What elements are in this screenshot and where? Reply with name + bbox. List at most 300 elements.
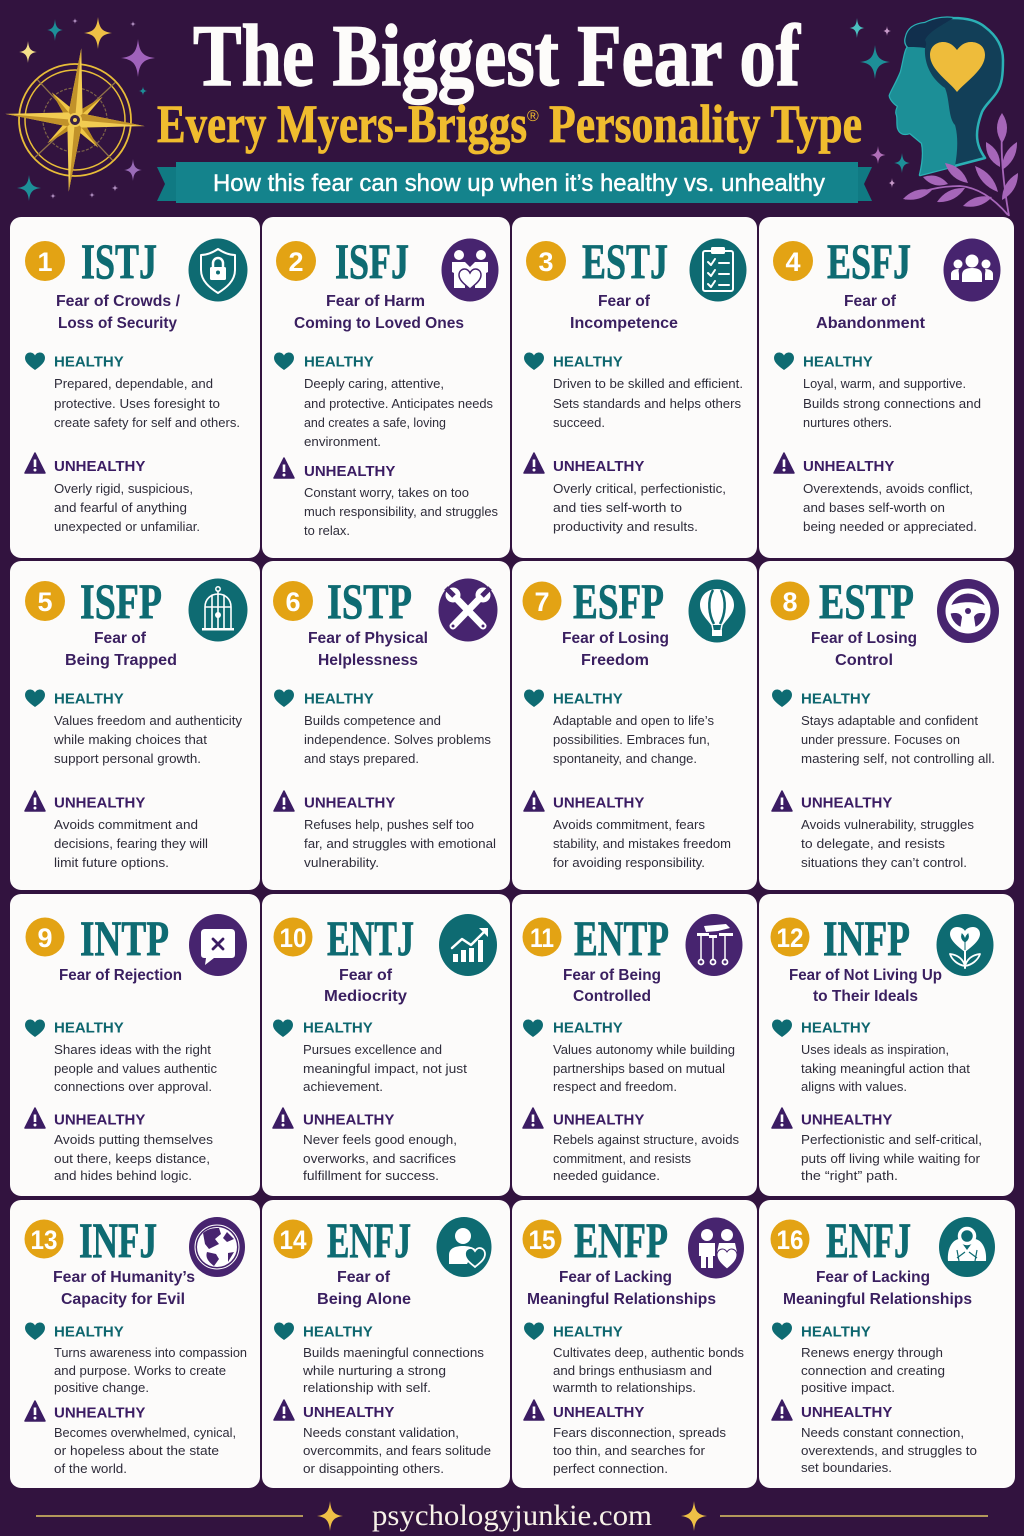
healthy section: people and values authentic [54, 1061, 218, 1076]
icon: two people with heart [688, 1218, 744, 1278]
unhealthy section: Needs constant connection, [801, 1425, 964, 1440]
unhealthy section: needed guidance. [553, 1168, 660, 1183]
type ISFJ: ISFJ [335, 233, 409, 289]
number badge 8: 8 [782, 587, 798, 617]
card 3: ESTJ [512, 217, 757, 558]
healthy section [274, 1322, 485, 1395]
unhealthy section: UNHEALTHY [54, 1112, 145, 1128]
fear heading: Fear of [94, 630, 147, 647]
unhealthy section: much responsibility, and struggles [304, 504, 498, 519]
healthy section: Pursues excellence and [303, 1042, 442, 1057]
banner ribbon: How this fear can show up when it’s healthy vs. unhealthy [213, 170, 825, 197]
unhealthy section: overextends, and struggles to [801, 1443, 977, 1458]
icon: crossed wrenches [438, 578, 498, 642]
number badge 2 [276, 241, 316, 281]
unhealthy section: to delegate, and resists [801, 836, 946, 851]
fear heading: Being Trapped [65, 652, 177, 669]
fear heading: Capacity for Evil [61, 1291, 185, 1308]
healthy section: HEALTHY [553, 690, 623, 708]
type ESTP: ESTP [819, 573, 914, 629]
healthy section: while nurturing a strong [302, 1363, 446, 1378]
fear heading: Fear of Physical [308, 630, 428, 647]
healthy section: Uses ideals as inspiration, [801, 1042, 949, 1057]
healthy section: Prepared, dependable, and [54, 376, 213, 391]
card 5: ISFP [10, 561, 260, 890]
icon: globe [189, 1217, 245, 1277]
card 12: INFP [759, 894, 1014, 1196]
healthy section: positive change. [54, 1380, 149, 1395]
type ISTP: ISTP [327, 573, 412, 629]
number badge 14 [274, 1220, 312, 1258]
unhealthy section: or hopeless about the state [54, 1443, 219, 1458]
fear heading: Fear of Crowds / [56, 293, 181, 310]
card 10: ENTJ [262, 894, 510, 1196]
number badge 5: 5 [37, 587, 53, 617]
healthy section: and brings enthusiasm and [553, 1363, 712, 1378]
healthy section: Shares ideas with the right [54, 1042, 211, 1057]
unhealthy section [25, 1108, 214, 1183]
number badge 1 [25, 241, 65, 281]
fear heading: Mediocrity [324, 988, 407, 1005]
healthy section: HEALTHY [303, 1020, 373, 1036]
healthy section: possibilities. Embraces fun, [553, 732, 710, 747]
healthy section: warmth to relationships. [552, 1380, 696, 1395]
healthy section: aligns with values. [801, 1079, 907, 1094]
unhealthy section: Constant worry, takes on too [304, 485, 469, 500]
healthy section: and creates a safe, loving [304, 415, 446, 430]
healthy section: Deeply caring, attentive, [304, 376, 444, 391]
unhealthy section: UNHEALTHY [54, 1404, 145, 1422]
number badge 15: 15 [528, 1225, 556, 1255]
fear heading: Meaningful Relationships [783, 1291, 972, 1308]
fear heading [53, 1269, 195, 1308]
unhealthy section: UNHEALTHY [304, 794, 395, 812]
card 7: ESFP [512, 561, 757, 890]
icon: hot air balloon [688, 580, 746, 642]
healthy section: connection and creating [801, 1363, 945, 1378]
type ISTJ: ISTJ [81, 233, 157, 289]
unhealthy section: UNHEALTHY [303, 1112, 394, 1128]
card 13: INFJ [10, 1200, 260, 1488]
unhealthy section: stability, and mistakes freedom [553, 836, 731, 851]
unhealthy section: UNHEALTHY [801, 794, 892, 812]
healthy section: and stays prepared. [304, 751, 419, 766]
fear heading: Abandonment [816, 315, 926, 332]
healthy section [274, 352, 493, 449]
unhealthy section [274, 791, 496, 870]
icon: rising bar chart [439, 914, 497, 976]
subtitle: Every Myers-Briggs Personality Type: Every Myers-Briggs [157, 94, 527, 154]
fear heading: Fear of Losing [811, 630, 917, 647]
number badge 13 [24, 1220, 64, 1258]
healthy section: HEALTHY [54, 354, 124, 370]
fear heading [783, 1269, 972, 1308]
healthy section: while making choices that [53, 732, 207, 747]
fear heading: Fear of Losing [562, 630, 669, 647]
fear heading: Loss of Security [58, 315, 177, 332]
unhealthy section: Fears disconnection, spreads [553, 1425, 727, 1440]
healthy section: HEALTHY [553, 354, 623, 370]
number badge 15 [522, 1220, 562, 1258]
healthy section: HEALTHY [553, 1324, 623, 1340]
unhealthy section: and ties self-worth to [553, 500, 682, 515]
unhealthy section [25, 791, 208, 870]
healthy section: connections over approval. [54, 1079, 212, 1094]
healthy section: Stays adaptable and confident [801, 713, 978, 728]
healthy section: and protective. Anticipates needs [304, 396, 493, 411]
icon: clipboard checklist [690, 238, 746, 302]
unhealthy section: Needs constant validation, [303, 1425, 459, 1440]
unhealthy section: Avoids commitment, fears [553, 817, 706, 832]
healthy section: Cultivates deep, authentic bonds [553, 1345, 744, 1360]
unhealthy section: unexpected or unfamiliar. [54, 519, 200, 534]
healthy section: Driven to be skilled and efficient. [553, 376, 743, 391]
healthy section: Sets standards and helps others [553, 396, 742, 411]
unhealthy section [772, 1108, 982, 1183]
healthy section: support personal growth. [54, 751, 201, 766]
healthy section: HEALTHY [303, 1324, 373, 1340]
healthy section: relationship with self. [303, 1380, 431, 1395]
number badge 11: 11 [530, 923, 554, 953]
icon: shield with lock [188, 238, 248, 302]
fear heading: Fear of Rejection [59, 967, 182, 984]
number badge 1: 1 [37, 247, 53, 277]
healthy section: Loyal, warm, and supportive. [803, 376, 966, 391]
card 15: ENFP [512, 1200, 757, 1488]
healthy section [25, 690, 243, 766]
unhealthy section: overworks, and sacrifices [303, 1151, 457, 1166]
subtitle: Every Myers-Briggs Personality Type [157, 94, 862, 154]
healthy section [273, 1020, 467, 1094]
number badge 2: 2 [288, 247, 304, 277]
unhealthy section: Refuses help, pushes self too [304, 817, 474, 832]
healthy section: mastering self, not controlling all. [801, 751, 995, 766]
unhealthy section [774, 453, 977, 534]
fear heading: Fear of Being [563, 967, 661, 984]
unhealthy section: UNHEALTHY [553, 458, 644, 475]
type ENTJ: ENTJ [327, 910, 414, 966]
icon: person with heart [436, 1217, 492, 1277]
number badge 12 [770, 918, 810, 956]
fear heading [789, 967, 942, 1005]
healthy section [274, 690, 491, 766]
fear heading: Being Alone [317, 1291, 411, 1308]
unhealthy section: too thin, and searches for [553, 1443, 706, 1458]
unhealthy section: UNHEALTHY [803, 458, 894, 475]
healthy section: nurtures others. [803, 415, 892, 430]
fear heading: Meaningful Relationships [527, 1291, 716, 1308]
unhealthy section: UNHEALTHY [801, 1112, 892, 1128]
unhealthy section [524, 1400, 727, 1476]
number badge 16: 16 [776, 1225, 804, 1255]
decorative stars left [17, 17, 155, 201]
healthy section: Builds maeningful connections [303, 1345, 485, 1360]
healthy section: under pressure. Focuses on [801, 732, 960, 747]
card 4: ESFJ [759, 217, 1014, 558]
unhealthy section [523, 1108, 740, 1183]
unhealthy section: Becomes overwhelmed, cynical, [54, 1425, 236, 1440]
fear heading: Fear of [339, 967, 393, 984]
footer [36, 1499, 988, 1532]
fear heading [56, 293, 181, 332]
unhealthy section: Overly critical, perfectionistic, [553, 481, 726, 496]
unhealthy section: and hides behind logic. [54, 1168, 192, 1183]
type ESTJ: ESTJ [582, 233, 668, 289]
unhealthy section: UNHEALTHY [553, 1404, 644, 1421]
unhealthy section: commitment, and resists [553, 1151, 691, 1166]
fear heading [816, 293, 926, 332]
healthy section: Values autonomy while building [553, 1042, 735, 1057]
type ESFJ: ESFJ [827, 233, 911, 289]
healthy section [523, 1020, 735, 1094]
unhealthy section [25, 453, 200, 534]
unhealthy section: perfect connection. [553, 1461, 668, 1476]
unhealthy section: and fearful of anything [54, 500, 187, 515]
healthy section: taking meaningful action that [801, 1061, 970, 1076]
healthy section: partnerships based on mutual [553, 1061, 725, 1076]
unhealthy section: out there, keeps distance, [54, 1151, 210, 1166]
number badge 3: 3 [538, 247, 554, 277]
unhealthy section: the “right” path. [801, 1168, 898, 1183]
fear heading: Fear of Lacking [559, 1269, 672, 1286]
healthy section: respect and freedom. [553, 1079, 677, 1094]
unhealthy section: Never feels good enough, [303, 1132, 457, 1147]
healthy section: HEALTHY [304, 690, 374, 708]
healthy section [772, 690, 995, 766]
healthy section: HEALTHY [801, 690, 871, 708]
unhealthy section [772, 791, 974, 870]
unhealthy section: set boundaries. [801, 1460, 892, 1475]
icon: parents with heart [442, 238, 498, 302]
type ENTP: ENTP [574, 910, 669, 966]
unhealthy section: puts off living while waiting for [801, 1151, 981, 1166]
unhealthy section: productivity and results. [553, 519, 698, 534]
unhealthy section: Overly rigid, suspicious, [54, 481, 193, 496]
number badge 12: 12 [776, 923, 804, 953]
decorative stars right [850, 18, 910, 188]
card 2: ISFJ [262, 217, 510, 558]
fear heading: Coming to Loved Ones [294, 315, 464, 332]
number badge 7 [522, 582, 562, 620]
card 1: ISTJ [10, 217, 260, 558]
fear heading [65, 630, 177, 669]
icon: birdcage [188, 578, 248, 642]
fear heading: Controlled [573, 988, 651, 1005]
unhealthy section: decisions, fearing they will [54, 836, 208, 851]
number badge 10 [274, 918, 312, 956]
unhealthy section: Rebels against structure, avoids [553, 1132, 740, 1147]
fear heading: Fear of Lacking [816, 1269, 930, 1286]
unhealthy section: fulfillment for success. [303, 1168, 439, 1183]
icon: purple leaves [903, 113, 1018, 216]
number badge 16 [770, 1220, 810, 1258]
type ISFP: ISFP [80, 573, 162, 629]
unhealthy section: Overextends, avoids conflict, [803, 481, 973, 496]
healthy section: Values freedom and authenticity [54, 713, 243, 728]
card 16: ENFJ [759, 1200, 1015, 1488]
unhealthy section: UNHEALTHY [553, 1112, 644, 1128]
unhealthy section: Avoids putting themselves [54, 1132, 214, 1147]
unhealthy section: to relax. [304, 523, 350, 538]
unhealthy section: UNHEALTHY [303, 1404, 394, 1421]
unhealthy section: UNHEALTHY [54, 458, 145, 475]
fear heading [308, 630, 428, 669]
fear heading [570, 293, 678, 332]
unhealthy section: or disappointing others. [303, 1461, 444, 1476]
healthy section [772, 1020, 970, 1094]
icon: compass [0, 42, 151, 198]
unhealthy section: vulnerability. [304, 855, 379, 870]
icon: steering wheel [937, 579, 999, 643]
unhealthy section: UNHEALTHY [304, 463, 395, 480]
unhealthy section [25, 1401, 236, 1476]
healthy section [774, 352, 981, 430]
number badge 5 [25, 581, 65, 621]
icon: heart growing as plant [936, 914, 994, 976]
unhealthy section: for avoiding responsibility. [553, 855, 705, 870]
healthy section: Adaptable and open to life’s [553, 713, 714, 728]
fear heading [562, 630, 669, 669]
healthy section: Renews energy through [801, 1345, 943, 1360]
healthy section: meaningful impact, not just [303, 1061, 467, 1076]
healthy section: and purpose. Works to create [54, 1363, 226, 1378]
unhealthy section [274, 1400, 491, 1476]
number badge 8 [770, 582, 810, 620]
card 11: ENTP [512, 894, 757, 1196]
type ENFJ: ENFJ [826, 1212, 911, 1268]
healthy section: positive impact. [801, 1380, 895, 1395]
healthy section [524, 690, 714, 766]
fear heading: Fear of [844, 293, 897, 310]
icon: head silhouette with heart [890, 18, 1003, 175]
healthy section: Turns awareness into compassion [54, 1345, 247, 1360]
subtitle: Every Myers-Briggs Personality Type: Personality Type [549, 94, 862, 154]
healthy section: independence. Solves problems [304, 732, 491, 747]
unhealthy section: UNHEALTHY [801, 1404, 892, 1421]
number badge 10: 10 [280, 923, 306, 953]
icon: embracing figures [939, 1217, 995, 1277]
fear heading [317, 1269, 411, 1308]
type INFJ: INFJ [79, 1212, 157, 1268]
healthy section: HEALTHY [54, 1020, 124, 1036]
healthy section: Builds competence and [304, 713, 441, 728]
number badge 4 [773, 241, 813, 281]
number badge 6: 6 [285, 587, 301, 617]
card 6: ISTP [262, 561, 510, 890]
unhealthy section: being needed or appreciated. [803, 519, 977, 534]
number badge 11 [522, 918, 562, 956]
title: The Biggest Fear of: The Biggest Fear of [193, 8, 801, 105]
healthy section: Builds strong connections and [803, 396, 981, 411]
type ENFP: ENFP [574, 1212, 668, 1268]
unhealthy section: UNHEALTHY [54, 794, 145, 812]
unhealthy section: limit future options. [54, 855, 169, 870]
unhealthy section: and bases self-worth on [803, 500, 945, 515]
unhealthy section [274, 458, 498, 538]
healthy section: spontaneity, and change. [553, 751, 697, 766]
subtitle: Every Myers-Briggs Personality Type: ® [527, 108, 539, 125]
fear heading: to Their Ideals [813, 988, 918, 1005]
number badge 9: 9 [37, 923, 53, 953]
fear heading [527, 1269, 716, 1308]
healthy section [25, 1020, 218, 1094]
healthy section [25, 1322, 247, 1395]
fear heading: Fear of Humanity’s [53, 1269, 195, 1286]
fear heading [324, 967, 407, 1005]
type INFP: INFP [823, 910, 910, 966]
unhealthy section: situations they can’t control. [801, 855, 967, 870]
unhealthy section [273, 1108, 457, 1183]
healthy section: HEALTHY [803, 354, 873, 370]
healthy section: environment. [304, 434, 381, 449]
healthy section [772, 1322, 945, 1395]
unhealthy section: of the world. [54, 1461, 127, 1476]
healthy section: achievement. [303, 1079, 383, 1094]
fear heading: Helplessness [318, 652, 418, 669]
icon: group of people [944, 238, 1000, 302]
number badge 4: 4 [785, 247, 801, 277]
unhealthy section [524, 453, 726, 534]
unhealthy section: far, and struggles with emotional [304, 836, 496, 851]
healthy section: HEALTHY [54, 690, 124, 708]
fear heading: Control [835, 652, 893, 669]
card 9: INTP [10, 894, 260, 1196]
type INTP: INTP [80, 910, 169, 966]
healthy section: create safety for self and others. [54, 415, 240, 430]
healthy section: succeed. [553, 415, 605, 430]
fear heading: Fear of [337, 1269, 391, 1286]
unhealthy section [524, 791, 731, 870]
unhealthy section: overcommits, and fears solitude [303, 1443, 491, 1458]
fear heading: Freedom [581, 652, 649, 669]
fear heading: Fear of Harm [326, 293, 425, 310]
unhealthy section: Avoids vulnerability, struggles [801, 817, 974, 832]
number badge 6 [273, 581, 313, 621]
fear heading: Fear of [598, 293, 651, 310]
fear heading: Incompetence [570, 315, 678, 332]
healthy section: HEALTHY [801, 1020, 871, 1036]
type ESFP: ESFP [573, 573, 664, 629]
healthy section: HEALTHY [304, 354, 374, 370]
healthy section [524, 352, 743, 430]
number badge 3 [526, 241, 566, 281]
healthy section: protective. Uses foresight to [54, 396, 220, 411]
fear heading [294, 293, 464, 332]
icon: marionette control bar [686, 914, 742, 976]
healthy section: HEALTHY [801, 1324, 871, 1340]
unhealthy section: Perfectionistic and self-critical, [801, 1132, 982, 1147]
healthy section [25, 352, 240, 430]
number badge 7: 7 [534, 587, 550, 617]
unhealthy section: UNHEALTHY [553, 794, 644, 812]
fear heading [563, 967, 661, 1005]
healthy section: HEALTHY [54, 1324, 124, 1340]
unhealthy section: Avoids commitment and [54, 817, 198, 832]
number badge 9 [26, 918, 64, 956]
card 8: ESTP [759, 561, 1014, 890]
healthy section: HEALTHY [553, 1020, 623, 1036]
number badge 13: 13 [30, 1225, 58, 1255]
banner ribbon [157, 162, 872, 203]
icon: speech bubble with X [189, 914, 247, 976]
healthy section [524, 1322, 744, 1395]
fear heading: Fear of Not Living Up [789, 967, 942, 984]
number badge 14: 14 [280, 1225, 306, 1255]
card 14: ENFJ [262, 1200, 510, 1488]
unhealthy section [772, 1400, 977, 1475]
type ENFJ: ENFJ [327, 1212, 411, 1268]
fear heading [811, 630, 917, 669]
